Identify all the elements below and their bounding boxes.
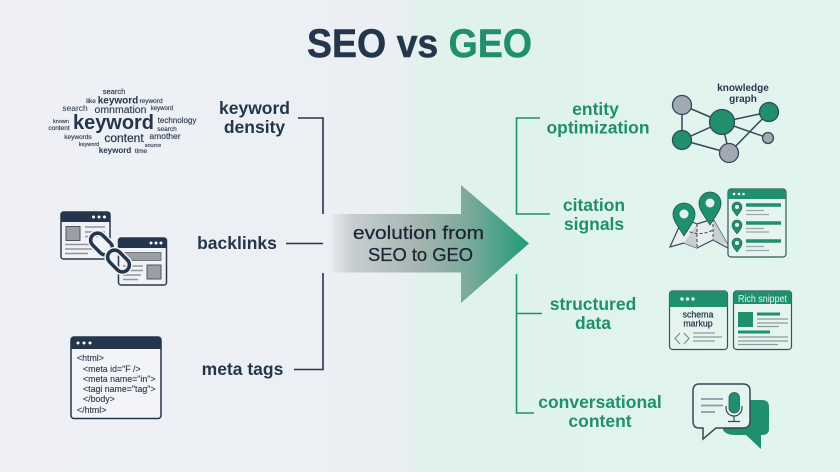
icon: map pins and listing	[670, 189, 786, 257]
title: SEO vs GEO	[307, 22, 532, 66]
icon: keyword word cloud: time	[135, 148, 148, 155]
icon: keyword word cloud: keyword	[99, 146, 131, 155]
folded map	[670, 218, 728, 248]
icon: html code window: </body>	[83, 394, 115, 404]
left browser window	[61, 212, 110, 259]
icon: keyword word cloud: reyword	[139, 98, 163, 105]
icon: keyword word cloud: content	[104, 131, 144, 145]
icon: knowledge graph	[672, 83, 778, 162]
connector: backlinks	[286, 242, 323, 244]
label: keyword density: keyword	[219, 98, 290, 118]
green back bubble	[723, 400, 769, 449]
icon: keyword word cloud: keyword	[98, 96, 138, 106]
label: backlinks: backlinks	[197, 233, 277, 253]
label: entity optimization: optimization	[546, 118, 650, 138]
outlined front bubble	[693, 384, 750, 439]
right browser window	[118, 238, 166, 285]
text lines	[701, 399, 723, 412]
icon: keyword word cloud: search	[103, 87, 125, 96]
icon: keyword word cloud: amother	[149, 131, 181, 141]
icon: html code window: </html>	[77, 405, 106, 415]
icon: linked browser windows	[61, 212, 166, 285]
connector: meta tags	[294, 273, 323, 370]
icon: rich snippet card	[734, 291, 792, 350]
icon: keyword word cloud: search	[157, 126, 177, 133]
connector: structured data and conversational content	[516, 274, 542, 413]
icon: keyword word cloud: keyword	[151, 106, 173, 112]
icon: keyword word cloud	[48, 87, 196, 155]
label: meta tags: meta tags	[202, 359, 284, 379]
arrow label: evolution from	[353, 222, 484, 243]
graph nodes	[672, 96, 778, 162]
icon: keyword word cloud: like	[86, 98, 96, 105]
microphone	[726, 392, 742, 422]
icon: html code window: <meta id="F />	[83, 364, 141, 374]
graph edges	[682, 105, 769, 153]
label: entity optimization: entity	[572, 99, 619, 119]
icon: rich snippet card: Rich snippet	[738, 294, 787, 305]
arrow label	[353, 222, 484, 265]
icon: html code window	[71, 337, 161, 418]
icon: html code window: <html>	[77, 353, 104, 363]
icon: keyword word cloud: keywords	[64, 134, 92, 141]
icon: schema markup card	[670, 291, 728, 350]
label: structured data: data	[575, 313, 611, 333]
icon: keyword word cloud: source	[145, 143, 161, 149]
icon: html code window: <tagi name="tag">	[83, 384, 156, 394]
map pins	[673, 203, 695, 236]
icon: conversation bubbles with microphone	[693, 384, 769, 449]
label: conversational content: content	[568, 411, 632, 431]
icon: keyword word cloud: search	[62, 103, 88, 113]
icon: schema markup card: schema	[683, 310, 714, 320]
icon: keyword word cloud: keyword	[73, 111, 154, 134]
icon: keyword word cloud: content	[48, 125, 70, 132]
icon: schema markup card: markup	[683, 318, 713, 328]
listing panel	[728, 189, 786, 257]
graph caption: knowledge	[717, 83, 769, 94]
icon: keyword word cloud: keyword	[79, 142, 99, 148]
label: keyword density: density	[224, 117, 285, 137]
arrow label: SEO to GEO	[368, 244, 473, 265]
label: citation signals: signals	[564, 214, 624, 234]
label: citation signals: citation	[563, 195, 625, 215]
icon: html code window: <meta name="in">	[83, 374, 156, 384]
connector: keyword density	[298, 118, 323, 214]
central arrow	[332, 185, 529, 303]
graph caption: graph	[729, 94, 757, 105]
connector: entity optimization	[516, 118, 550, 214]
icon: keyword word cloud: known	[53, 119, 69, 125]
icon: keyword word cloud: technology	[158, 116, 196, 125]
chain link	[88, 230, 132, 275]
label: conversational content: conversational	[538, 392, 662, 412]
icon: keyword word cloud: omnmation	[95, 104, 147, 116]
label: structured data: structured	[550, 294, 636, 314]
